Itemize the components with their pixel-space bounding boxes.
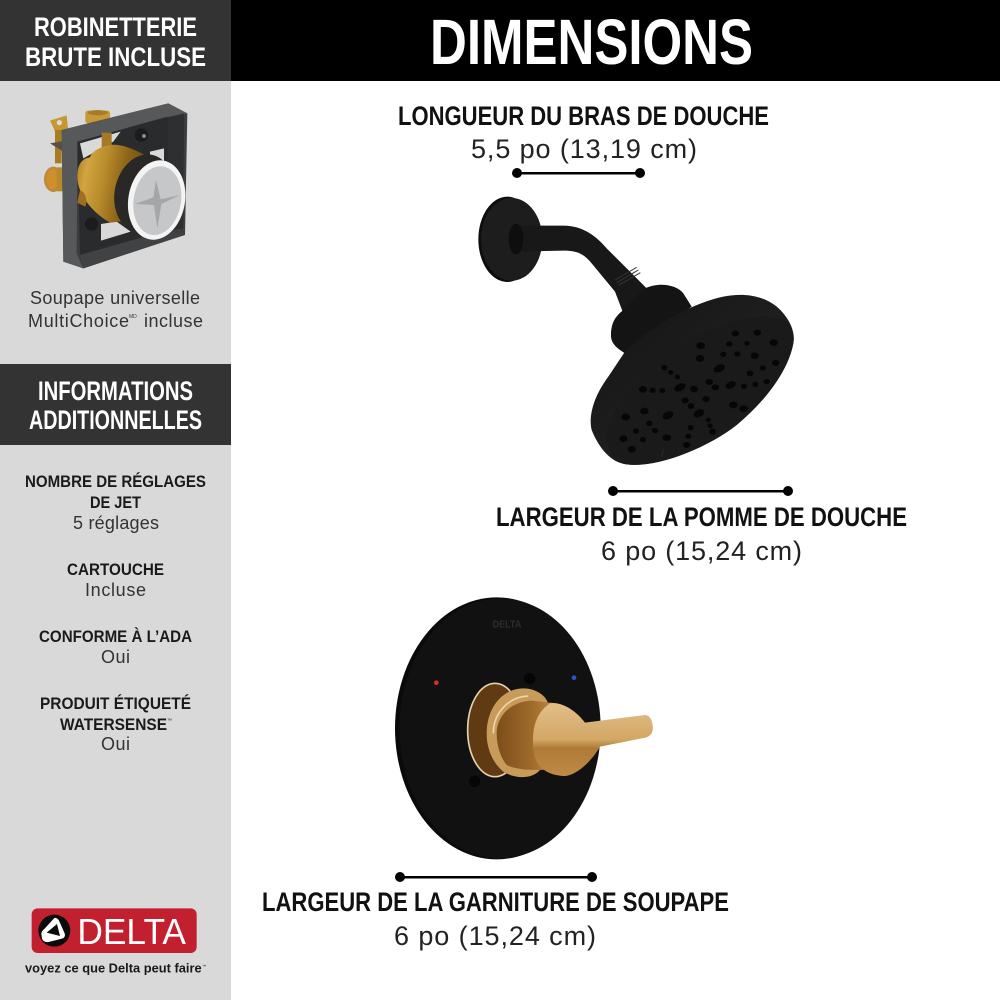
label: largeur de la pomme de douche <box>496 502 907 566</box>
spec: watersense: ™ <box>167 718 172 724</box>
logo: delta: DELTA <box>77 911 186 952</box>
text: valve caption: MD <box>129 314 137 320</box>
heading: informations additionnelles <box>0 364 231 445</box>
shower head <box>591 285 794 465</box>
dimension line: arm length <box>512 168 645 178</box>
label: longueur du bras de douche: 5,5 po (13,19 cm) <box>471 134 697 164</box>
text: valve caption: Soupape universelle <box>30 288 200 308</box>
spec: watersense <box>40 694 191 754</box>
label: largeur de la garniture de soupape: 6 po (15,24 cm) <box>394 921 596 951</box>
mounting frame <box>62 103 187 268</box>
spec: cartouche <box>67 560 164 600</box>
shower arm and flange <box>478 197 652 313</box>
logo: delta: voyez ce que Delta peut faire <box>25 961 202 976</box>
spec: conforme ada: Oui <box>101 647 130 667</box>
logo: delta <box>25 908 206 976</box>
dimension line: trim width <box>395 872 597 882</box>
head face <box>607 317 794 465</box>
title: dimensions <box>231 0 1000 81</box>
head rim <box>591 295 794 465</box>
text: valve caption: MultiChoice <box>28 311 129 331</box>
spec: watersense: Oui <box>101 734 130 754</box>
label: largeur de la pomme de douche: LARGEUR DE LA POMME DE DOUCHE <box>496 502 907 532</box>
spec: nombre de reglages: DE JET <box>90 493 142 512</box>
spec: cartouche: CARTOUCHE <box>67 560 164 579</box>
trim plate <box>395 597 601 859</box>
spec: watersense: WATERSENSE <box>60 715 167 734</box>
valve cap <box>107 149 192 244</box>
heading: robinetterie brute incluse: BRUTE INCLUSE <box>25 42 206 72</box>
spec: watersense: PRODUIT ÉTIQUETÉ <box>40 694 191 713</box>
spec: cartouche: Incluse <box>85 580 146 600</box>
spec: conforme ada: CONFORME À L’ADA <box>39 627 192 646</box>
text: valve caption: incluse <box>144 311 203 331</box>
trim plate: DELTA <box>493 619 522 630</box>
spec: nombre de reglages <box>25 472 206 533</box>
screws <box>135 128 148 142</box>
heading: informations additionnelles: ADDITIONNELLES <box>29 405 202 435</box>
collar <box>611 285 692 353</box>
dimension line: head width <box>608 486 793 496</box>
heading: robinetterie brute incluse <box>0 0 231 81</box>
heading: robinetterie brute incluse: ROBINETTERIE <box>34 12 197 42</box>
label: largeur de la garniture de soupape: LARGEUR DE LA GARNITURE DE SOUPAPE <box>262 887 729 917</box>
spec: conforme ada <box>39 627 192 667</box>
logo: delta: ™ <box>202 963 206 968</box>
spec: nombre de reglages: NOMBRE DE RÉGLAGES <box>25 472 206 491</box>
icon: rough-in valve <box>44 103 192 268</box>
spec: nombre de reglages: 5 réglages <box>73 513 159 533</box>
label: largeur de la pomme de douche: 6 po (15,24 cm) <box>601 536 802 566</box>
brass body <box>102 133 112 148</box>
valve handle <box>468 683 653 777</box>
title: dimensions: DIMENSIONS <box>430 6 753 78</box>
label: longueur du bras de douche: LONGUEUR DU BRAS DE DOUCHE <box>398 101 769 131</box>
spray holes <box>619 330 779 453</box>
sidebar background <box>0 81 231 1000</box>
heading: informations additionnelles: INFORMATIONS <box>38 376 193 406</box>
label: largeur de la garniture de soupape <box>262 887 729 951</box>
label: longueur du bras de douche <box>398 101 769 164</box>
text: valve caption <box>28 288 203 331</box>
